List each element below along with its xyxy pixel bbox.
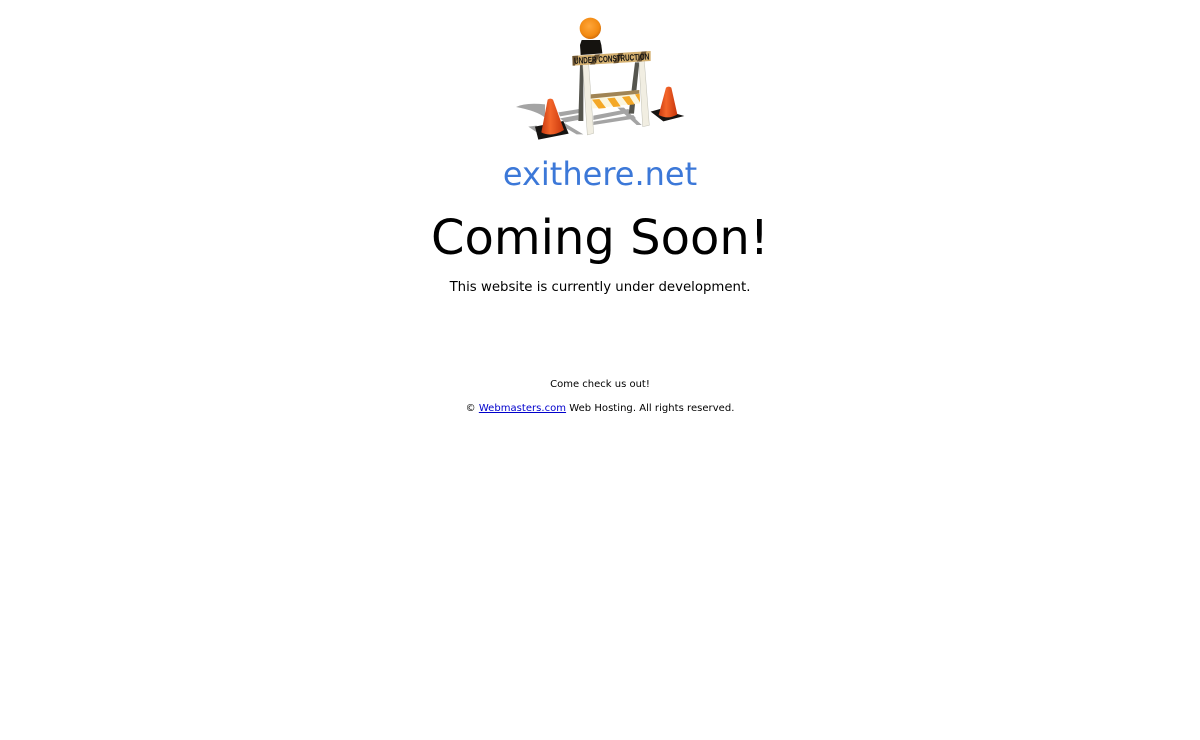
lamp bbox=[580, 18, 601, 39]
front legs bbox=[583, 61, 649, 135]
shadow bbox=[516, 104, 642, 134]
right cone bbox=[651, 87, 684, 121]
heading: Coming Soon: Coming Soon! bbox=[431, 210, 769, 266]
striped board bbox=[591, 90, 640, 109]
site name: exithere.net bbox=[503, 155, 697, 193]
lamp base bbox=[580, 40, 602, 55]
tagline: This website is currently under development. bbox=[450, 280, 750, 295]
sign board bbox=[572, 51, 651, 66]
text: come check us out: Come check us out! bbox=[550, 379, 650, 390]
back legs bbox=[578, 62, 639, 121]
left cone bbox=[535, 99, 569, 140]
icon: under construction barricade with cones bbox=[516, 18, 684, 140]
sign board: UNDER CONSTRUCTION bbox=[574, 51, 650, 66]
footer: copyright: © Webmasters.com Web Hosting. All rights reserved. bbox=[466, 403, 734, 414]
